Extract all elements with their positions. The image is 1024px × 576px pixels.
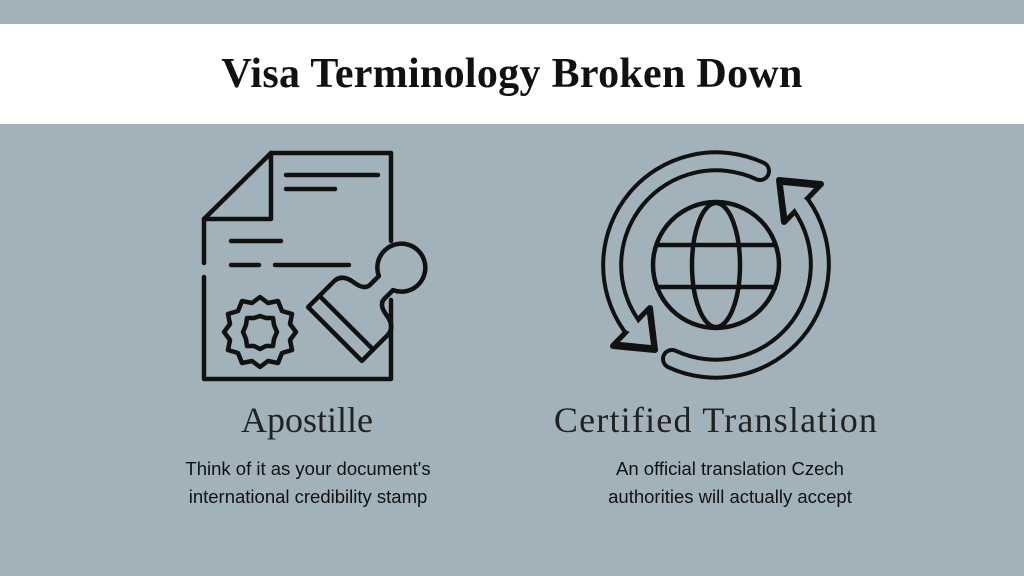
icon: apostille document with stamp — [204, 153, 445, 379]
heading: Apostille: Apostille — [241, 400, 373, 440]
text: apostille description — [185, 458, 431, 507]
title: Visa Terminology Broken Down — [221, 51, 803, 97]
text: translation description: authorities will actually accept — [608, 486, 852, 507]
text: apostille description: Think of it as your document's — [185, 458, 431, 479]
icon: globe with rotating arrows — [612, 161, 821, 369]
header band — [0, 24, 1024, 124]
text: translation description: An official translation Czech — [616, 458, 844, 479]
text: apostille description: international credibility stamp — [189, 486, 427, 507]
text: translation description — [608, 458, 852, 507]
heading: Certified Translation: Certified Translation — [554, 400, 878, 440]
